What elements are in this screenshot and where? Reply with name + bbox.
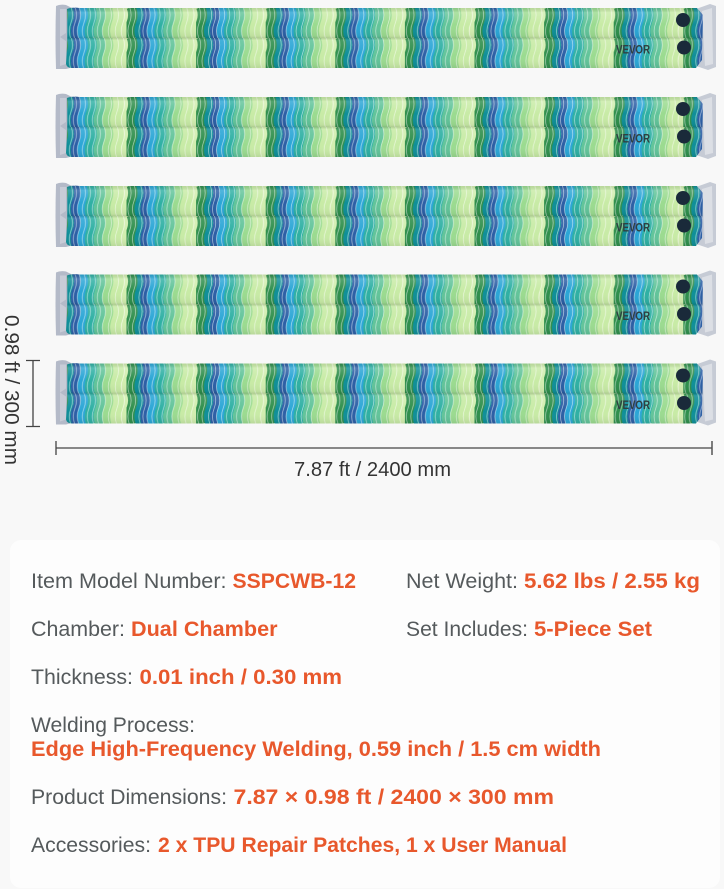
spec: accessories: Accessories: [31, 834, 151, 857]
spec: net weight [406, 570, 700, 593]
spec: item model number: Item Model Number: [31, 570, 226, 593]
spec: item model number: SSPCWB-12 [232, 570, 356, 593]
tube 2: VEVOR [616, 132, 650, 146]
height dimension marker: 0.98 ft / 300 mm [0, 315, 22, 465]
spec: set includes [406, 618, 652, 641]
tube 2 [56, 93, 716, 159]
width dimension marker [56, 441, 712, 481]
spec: product dimensions: 7.87 × 0.98 ft / 2400 × 300 mm [234, 786, 554, 809]
height dimension marker [0, 315, 40, 465]
spec: chamber [31, 618, 278, 641]
tube 1 [56, 4, 716, 70]
spec: net weight: Net Weight: [406, 570, 518, 593]
tube 3: VEVOR [616, 220, 650, 234]
tube 5 [56, 360, 716, 426]
spec: welding process: Edge High-Frequency Welding, 0.59 inch / 1.5 cm width [31, 738, 601, 761]
tube 3 [56, 182, 716, 248]
width dimension marker: 7.87 ft / 2400 mm [294, 459, 451, 481]
tube 1: VEVOR [616, 42, 650, 56]
spec: chamber: Dual Chamber [131, 618, 278, 641]
spec: accessories: 2 x TPU Repair Patches, 1 x User Manual [158, 834, 567, 857]
spec: welding process: Welding Process: [31, 714, 195, 737]
spec: thickness: 0.01 inch / 0.30 mm [140, 666, 342, 689]
spec: set includes: Set Includes: [406, 618, 528, 641]
panel: specifications [10, 540, 720, 888]
tube 4 [56, 270, 716, 336]
tube 5: VEVOR [616, 398, 650, 412]
spec: thickness [31, 666, 342, 689]
product illustration: five water tubes [56, 4, 716, 426]
spec: product dimensions [31, 786, 554, 809]
spec: chamber: Chamber: [31, 618, 125, 641]
spec: item model number [31, 570, 356, 593]
spec: product dimensions: Product Dimensions: [31, 786, 227, 809]
spec: thickness: Thickness: [31, 666, 133, 689]
spec: set includes: 5-Piece Set [534, 618, 652, 641]
spec: welding process [31, 714, 601, 761]
spec: net weight: 5.62 lbs / 2.55 kg [524, 570, 700, 593]
tube 4: VEVOR [616, 309, 650, 323]
